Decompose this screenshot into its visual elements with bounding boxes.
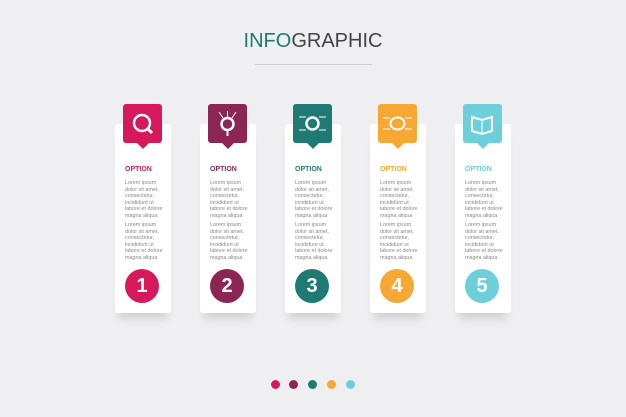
text: labore et dolore xyxy=(465,248,502,254)
text: magna aliqua xyxy=(295,255,327,261)
text: 5 xyxy=(476,275,488,297)
text: consectetur, xyxy=(295,193,324,199)
text: magna aliqua xyxy=(210,255,242,261)
text: Lorem ipsum xyxy=(380,222,411,228)
text: consectetur, xyxy=(125,193,154,199)
text: 2 xyxy=(221,275,233,297)
text: incididunt ut xyxy=(380,200,409,206)
text: incididunt ut xyxy=(210,242,239,248)
text: dolor sit amet, xyxy=(465,229,499,235)
text: labore et dolore xyxy=(465,206,502,212)
text: 1 xyxy=(136,275,148,297)
text: incididunt ut xyxy=(125,200,154,206)
text: dolor sit amet, xyxy=(380,187,414,193)
text: Lorem ipsum xyxy=(210,222,241,228)
text: dolor sit amet, xyxy=(210,229,244,235)
text: magna aliqua xyxy=(465,213,497,219)
text: consectetur, xyxy=(295,235,324,241)
text: magna aliqua xyxy=(380,255,412,261)
text: magna aliqua xyxy=(125,213,157,219)
text: magna aliqua xyxy=(465,255,497,261)
text: incididunt ut xyxy=(465,242,494,248)
panel: option 5 xyxy=(455,104,511,322)
text: dolor sit amet, xyxy=(125,187,159,193)
text: dolor sit amet, xyxy=(380,229,414,235)
text: labore et dolore xyxy=(210,248,247,254)
text: consectetur, xyxy=(380,193,409,199)
text: labore et dolore xyxy=(380,248,417,254)
text: labore et dolore xyxy=(295,248,332,254)
text: consectetur, xyxy=(125,235,154,241)
text: labore et dolore xyxy=(125,206,162,212)
text: consectetur, xyxy=(210,235,239,241)
text: OPTION xyxy=(380,166,407,173)
text: labore et dolore xyxy=(295,206,332,212)
title: INFOGRAPHIC xyxy=(244,30,382,52)
text: dolor sit amet, xyxy=(125,229,159,235)
text: labore et dolore xyxy=(125,248,162,254)
text: dolor sit amet, xyxy=(295,229,329,235)
text: dolor sit amet, xyxy=(210,187,244,193)
panel: option 1 xyxy=(115,104,171,322)
text: magna aliqua xyxy=(380,213,412,219)
text: incididunt ut xyxy=(465,200,494,206)
text: consectetur, xyxy=(465,193,494,199)
text: incididunt ut xyxy=(125,242,154,248)
text: consectetur, xyxy=(380,235,409,241)
text: OPTION xyxy=(125,166,152,173)
text: consectetur, xyxy=(210,193,239,199)
text: Lorem ipsum xyxy=(295,222,326,228)
panel: option 2 xyxy=(200,104,256,322)
text: Lorem ipsum xyxy=(295,180,326,186)
text: dolor sit amet, xyxy=(465,187,499,193)
text: incididunt ut xyxy=(380,242,409,248)
panel: option 3 xyxy=(285,104,341,322)
icon: brain circuit xyxy=(378,104,417,143)
icon: circuit eye xyxy=(293,104,332,143)
text: 3 xyxy=(306,275,318,297)
text: OPTION xyxy=(465,166,492,173)
text: magna aliqua xyxy=(210,213,242,219)
text: incididunt ut xyxy=(210,200,239,206)
text: incididunt ut xyxy=(295,200,324,206)
text: labore et dolore xyxy=(380,206,417,212)
pagination dots xyxy=(271,380,355,389)
text: Lorem ipsum xyxy=(210,180,241,186)
text: dolor sit amet, xyxy=(295,187,329,193)
text: Lorem ipsum xyxy=(125,222,156,228)
icon: book brain xyxy=(463,104,502,143)
text: 4 xyxy=(391,275,403,297)
text: Lorem ipsum xyxy=(465,222,496,228)
text: OPTION xyxy=(210,166,237,173)
text: OPTION xyxy=(295,166,322,173)
text: Lorem ipsum xyxy=(125,180,156,186)
text: labore et dolore xyxy=(210,206,247,212)
text: consectetur, xyxy=(465,235,494,241)
text: Lorem ipsum xyxy=(465,180,496,186)
panel: option 4 xyxy=(370,104,426,322)
text: incididunt ut xyxy=(295,242,324,248)
icon: brain search xyxy=(123,104,162,143)
icon: network gear xyxy=(208,104,247,143)
text: magna aliqua xyxy=(125,255,157,261)
text: Lorem ipsum xyxy=(380,180,411,186)
text: magna aliqua xyxy=(295,213,327,219)
